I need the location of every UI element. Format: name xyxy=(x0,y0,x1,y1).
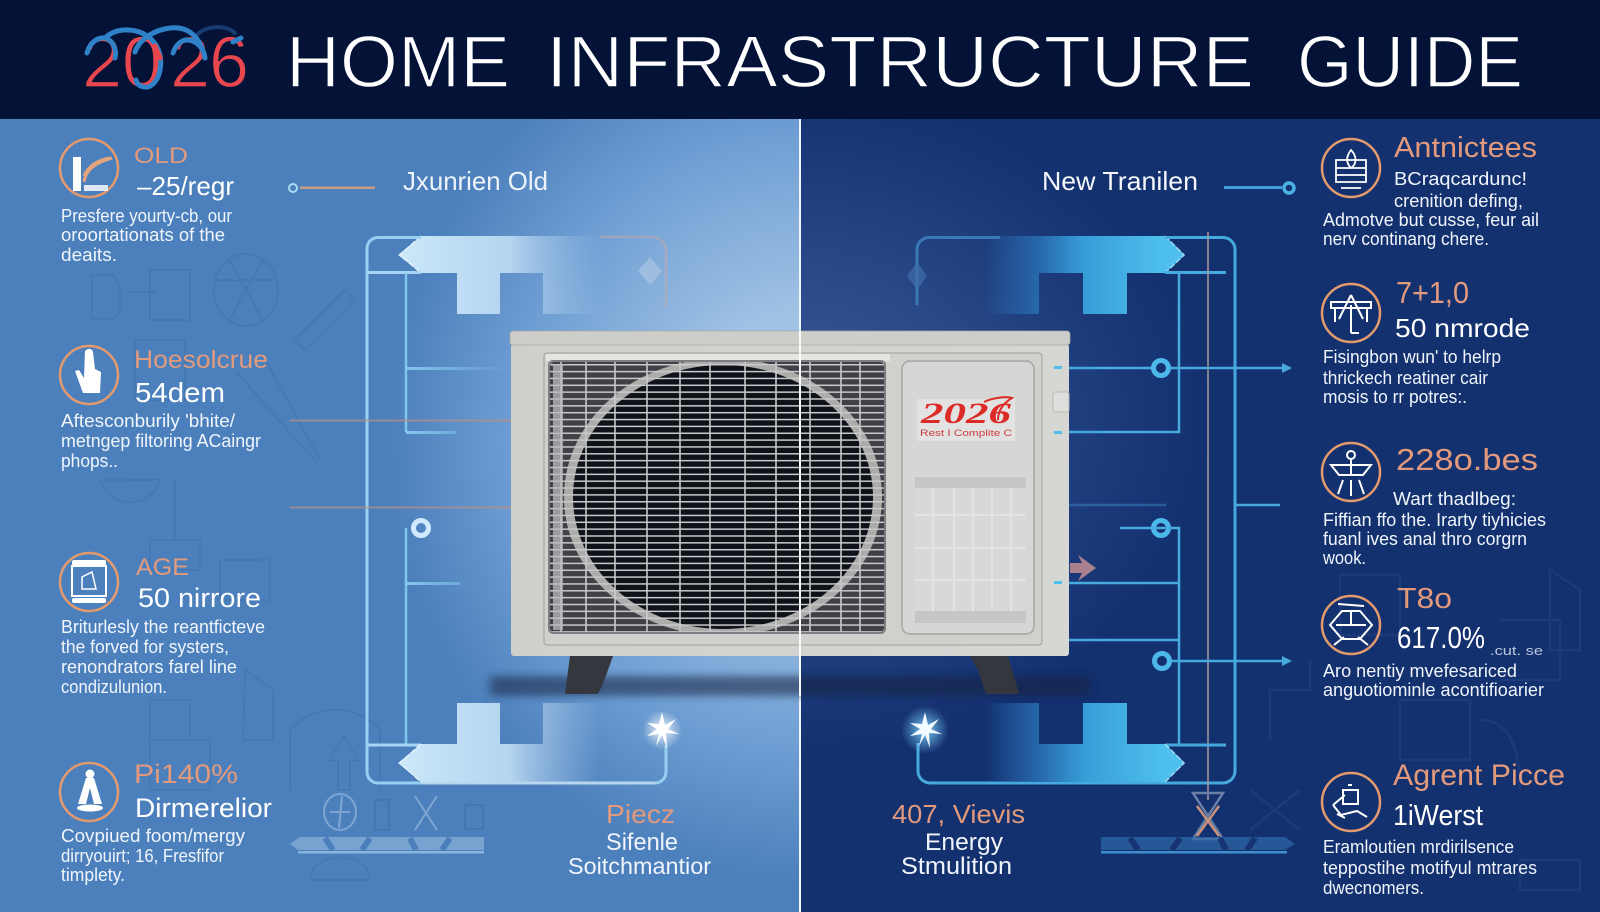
callout: left 2 xyxy=(60,346,268,471)
faint background line drawings, right xyxy=(1250,570,1580,890)
title: 2026 logo: 2026 xyxy=(82,23,249,103)
control panel xyxy=(902,361,1034,634)
bottom label: old side xyxy=(568,799,711,879)
icon: tool chart xyxy=(60,139,118,197)
callout: right 3: wook. xyxy=(1322,548,1366,568)
callout: left 2: Aftesconburily 'bhite/ xyxy=(61,411,235,431)
label: old side xyxy=(289,166,548,196)
callout: right 4: anguotiominle acontifioarier xyxy=(1323,680,1544,700)
callout: right 3: Fiffian ffo the. Irarty tiyhicies xyxy=(1323,510,1546,530)
callout: left 4: Covpiued foom/mergy xyxy=(61,826,245,846)
callout: right 5: dwecnomers. xyxy=(1323,878,1424,898)
callout: left 4: Dirmerelior xyxy=(135,793,272,823)
callout: left 2: 54dem xyxy=(135,377,225,408)
callout: right 1: Admotve but cusse, feur ail xyxy=(1323,210,1539,230)
side latch xyxy=(1053,392,1069,412)
logo label xyxy=(917,397,1015,441)
callout: left 1: –25/regr xyxy=(137,171,234,201)
icon: hand xyxy=(60,346,118,404)
logo label: 2026 xyxy=(920,397,1011,430)
icon: figure with bar xyxy=(1322,443,1380,501)
callout: right 2: mosis to rr potres:. xyxy=(1323,387,1467,407)
callout: right 3: fuanl ives anal thro corgrn xyxy=(1323,529,1527,549)
callout: right 2: Fisingbon wun' to helrp xyxy=(1323,347,1501,367)
callout: left 1: deaits. xyxy=(61,245,117,265)
callout: right 2 xyxy=(1322,275,1530,407)
label: old side: Jxunrien Old xyxy=(403,166,548,196)
callout: left 4 xyxy=(60,759,272,885)
bottom label: new side xyxy=(892,799,1025,880)
title: guide: GUIDE xyxy=(1297,22,1523,103)
callout: left 4: timplety. xyxy=(61,865,125,885)
callout: right 5: Eramloutien mrdirilsence xyxy=(1323,837,1514,857)
callout: left 3: AGE xyxy=(136,554,189,581)
bottom label: new side: Energy xyxy=(925,829,1003,856)
callout: right 2: thrickech reatiner cair xyxy=(1323,368,1488,388)
fan grille xyxy=(550,358,884,636)
label: new side: New Tranilen xyxy=(1042,166,1198,196)
callout: left 4: dirryouirt; 16, Fresfifor xyxy=(61,846,224,866)
callout: left 3: renondrators farel line xyxy=(61,657,237,677)
callout: left 2: Hoesolcrue xyxy=(134,346,268,374)
icon: machine xyxy=(1322,773,1380,831)
connector ticks on unit xyxy=(1054,366,1062,584)
callout: left 3: condizulunion. xyxy=(61,677,167,697)
callout: right 4: 617.0% xyxy=(1397,620,1485,655)
callout: right 5: teppostihe motifyul mtrares xyxy=(1323,858,1537,878)
unit feet xyxy=(565,656,1019,694)
icon: frame xyxy=(1322,284,1380,342)
callout: right 1 xyxy=(1322,132,1539,249)
callout: right 1: crenition defing, xyxy=(1394,191,1523,211)
callout: right 3 xyxy=(1322,442,1546,568)
callout: left 3: 50 nirrore xyxy=(138,583,261,613)
callout: right 1: Antnictees xyxy=(1394,132,1537,164)
callout: right 3: 228o.bes xyxy=(1396,442,1538,477)
callout: right 4: .cut. se xyxy=(1490,643,1543,658)
callout: right 4: Aro nentiy mvefesariced xyxy=(1323,661,1517,681)
bottom label: old side: Sifenle xyxy=(606,829,678,856)
icons: faded fan and tools, old side xyxy=(324,794,483,830)
title: home: HOME xyxy=(286,22,510,103)
icon: figure xyxy=(60,763,118,821)
callout: left 3: Briturlesly the reantficteve xyxy=(61,617,265,637)
label: new side xyxy=(1042,166,1294,196)
unit body xyxy=(511,344,1069,656)
header bar xyxy=(0,0,1600,119)
decorative strip: new side xyxy=(1101,837,1295,854)
bottom label: new side: Stmulition xyxy=(901,853,1012,880)
icon: gear frame xyxy=(1322,596,1380,654)
callout: left 2: phops.. xyxy=(61,451,118,471)
callout: left 1: OLD xyxy=(134,143,188,168)
callout: left 1: oroortationats of the xyxy=(61,225,225,245)
logo label: Rest I Complite C xyxy=(920,428,1013,438)
panel vent xyxy=(915,476,1026,623)
ground shadow xyxy=(490,676,1090,696)
callout: left 1 xyxy=(60,139,234,265)
callout: left 3 xyxy=(60,553,265,697)
icon: appliance xyxy=(60,553,118,611)
arrow: small pink arrow xyxy=(1070,555,1096,581)
callout: left 2: metngep filtoring ACaingr xyxy=(61,431,261,451)
faint background line drawings, left xyxy=(92,254,380,880)
right panel background xyxy=(800,119,1600,912)
bottom label: old side: Soitchmantior xyxy=(568,853,711,879)
callout: left 4: Pi140% xyxy=(134,759,238,789)
icon: flame unit xyxy=(1322,139,1380,197)
left panel background xyxy=(0,119,800,912)
callout: right 2: 7+1,0 xyxy=(1396,275,1469,310)
title: infrastructure: INFRASTRUCTURE xyxy=(546,22,1254,103)
callout: right 5: Agrent Picce xyxy=(1393,759,1565,792)
decorative strip: old side xyxy=(290,837,484,854)
unit lid xyxy=(510,331,1070,345)
pipe diagram: old side xyxy=(290,236,666,783)
icon: new side sparkle xyxy=(901,706,949,754)
centre divider xyxy=(799,119,801,912)
callout: right 3: Wart thadlbeg: xyxy=(1393,489,1516,509)
bottom label: old side: Piecz xyxy=(606,799,675,829)
callout: right 5 xyxy=(1322,759,1565,898)
callout: left 3: the forved for systers, xyxy=(61,637,229,657)
bottom label: new side: 407, Vievis xyxy=(892,799,1025,829)
callout: right 5: 1iWerst xyxy=(1393,800,1483,832)
air conditioner unit xyxy=(490,331,1090,696)
callout: right 1: BCraqcardunc! xyxy=(1394,169,1527,189)
icon: old side sparkle xyxy=(642,710,682,750)
centre divider over unit xyxy=(799,331,801,696)
callout: right 4: T8o xyxy=(1397,583,1452,615)
callout: right 4 xyxy=(1322,583,1544,700)
callout: left 1: Presfere yourty-cb, our xyxy=(61,206,232,226)
callout: right 1: nerv continang chere. xyxy=(1323,229,1489,249)
callout: right 2: 50 nmrode xyxy=(1395,313,1530,343)
pipe diagram: new side xyxy=(907,232,1292,800)
icon: X marker, new side xyxy=(1193,793,1223,839)
